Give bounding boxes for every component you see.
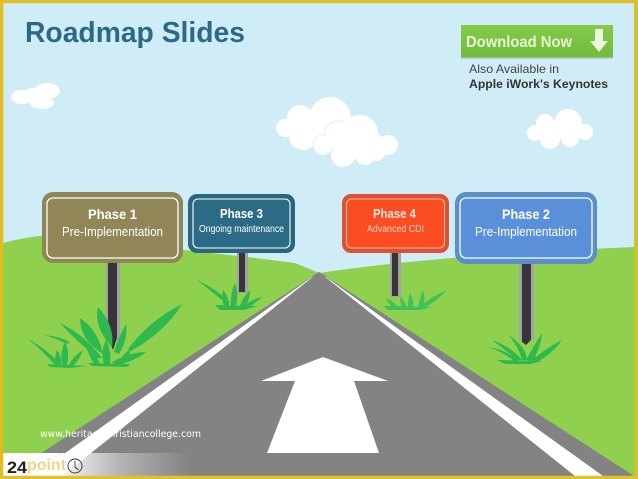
grass: phase 4 <box>383 290 447 310</box>
grass: phase 2 <box>487 333 562 364</box>
grass: phase 1 <box>28 304 182 368</box>
sign: phase 1: Phase 1 <box>88 206 137 222</box>
availability note: Also Available in <box>469 62 559 76</box>
title: Roadmap Slides <box>25 17 245 49</box>
icon: clock <box>68 459 82 473</box>
sign: phase 2: Phase 2 <box>502 206 550 222</box>
signpost: phase 4 <box>390 253 401 297</box>
sign: phase 4: Advanced CDI <box>367 223 424 235</box>
road arrow <box>261 357 388 453</box>
cloud: right <box>527 109 593 149</box>
sign: phase 2 <box>455 192 597 264</box>
watermark: www.heritagechristiancollege.com <box>40 429 201 440</box>
sign: phase 3: Ongoing maintenance <box>199 223 284 235</box>
signpost: phase 1 <box>106 263 120 350</box>
sign: phase 1 <box>42 192 183 263</box>
sign: phase 2: Pre-Implementation <box>475 224 577 239</box>
download button <box>461 25 613 58</box>
cloud: centre <box>276 97 398 167</box>
sign: phase 3: Phase 3 <box>220 207 263 221</box>
sign: phase 4 <box>342 194 449 253</box>
sign: phase 4: Phase 4 <box>373 207 416 221</box>
footer logo band <box>3 453 190 477</box>
left lane stripe <box>33 272 319 476</box>
icon: download arrow <box>590 29 608 52</box>
availability note: Apple iWork's Keynotes <box>469 77 608 91</box>
hills <box>3 235 634 476</box>
cloud: small left <box>11 83 60 109</box>
right lane stripe <box>319 272 603 476</box>
logo text: 24 <box>7 458 28 477</box>
footer logo band: point <box>27 457 66 474</box>
sign: phase 1: Pre-Implementation <box>62 224 163 239</box>
road <box>6 272 634 476</box>
signpost: phase 3 <box>237 253 248 293</box>
download button: Download Now <box>466 34 573 51</box>
grass: phase 3 <box>197 280 262 310</box>
sign: phase 3 <box>188 194 295 253</box>
availability note <box>469 62 608 91</box>
signpost: phase 2 <box>519 264 534 345</box>
